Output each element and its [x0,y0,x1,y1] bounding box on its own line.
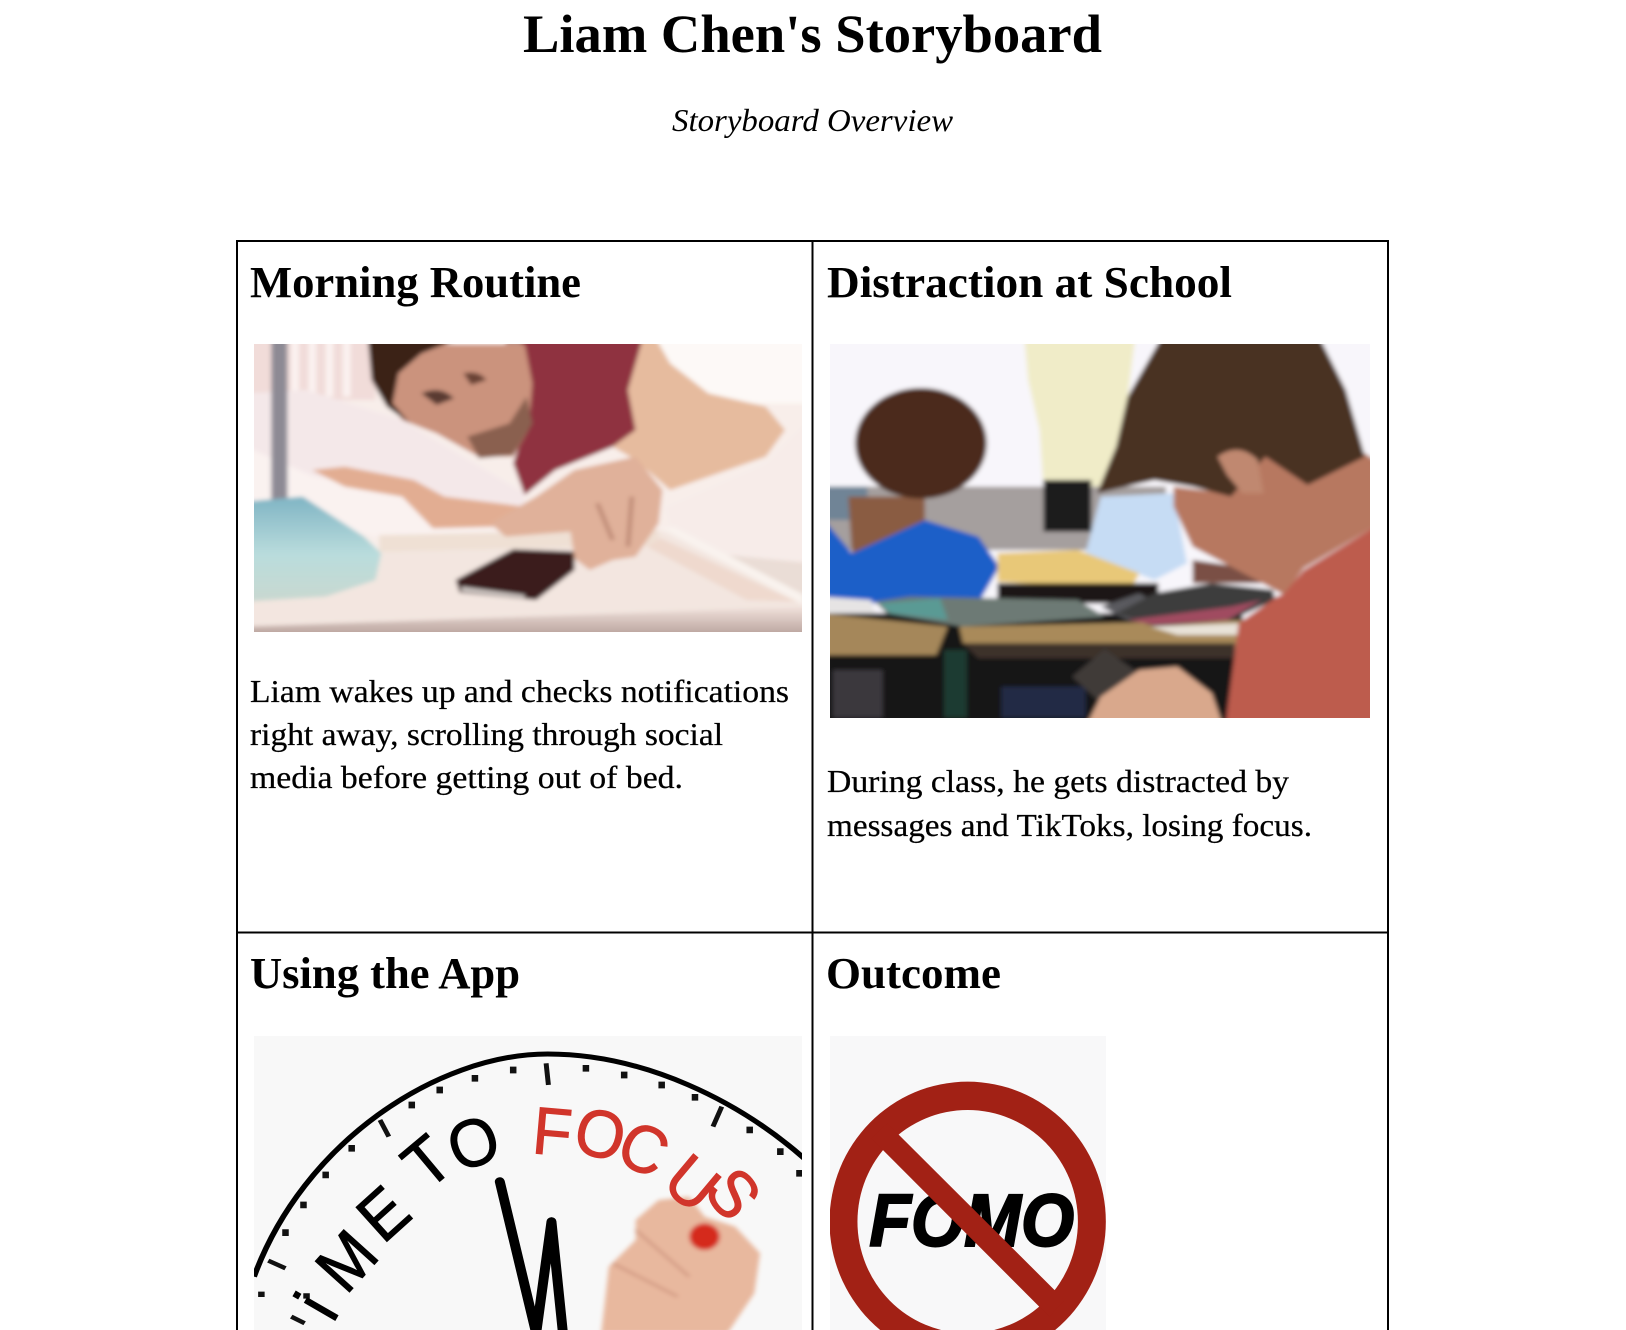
subtitle: Storyboard Overview [672,102,954,138]
page title: Liam Chen's Storyboard [523,4,1102,64]
clock lettering: focus [536,1107,758,1218]
caption: distraction at school: messages and TikToks, losing focus. [827,808,1312,843]
panel: outcome [825,949,1112,1330]
clock lettering: focus: O [568,1092,633,1176]
clock ticks [261,1063,799,1323]
panel: using the app [250,949,808,1330]
caption: morning routine: right away, scrolling through social [250,717,723,752]
clock lettering: time to: M [301,1216,392,1306]
caption: morning routine [250,674,789,795]
clock lettering: focus: U [651,1140,734,1227]
heading: distraction at school: Distraction at School [827,258,1232,307]
caption: morning routine: Liam wakes up and checks notifications [250,674,789,709]
heading: outcome: Outcome [826,949,1001,998]
clock lettering: focus: S [691,1154,776,1233]
image: no FOMO sign: FOMO [869,1179,1074,1262]
caption: distraction at school: During class, he gets distracted by [827,764,1289,799]
image: time to focus clock [254,1036,808,1330]
clock lettering: time to: E [343,1172,424,1256]
clock arc [254,1054,808,1277]
storyboard table grid [237,241,1388,1330]
photo: man reaching for phone in bed [245,337,812,643]
clock lettering: time to: O [437,1099,509,1186]
hand holding marker [601,1197,760,1330]
image: no FOMO sign [830,1082,1106,1330]
clock lettering: focus: F [530,1093,575,1171]
heading: using the app: Using the App [250,949,520,998]
clock lettering: time to [292,1118,496,1321]
clock hands [500,1182,563,1330]
storyboard page [236,14,1389,1330]
clock lettering: time to: T [388,1121,466,1203]
clock lettering: focus: C [607,1105,680,1192]
panel: morning routine [245,258,812,795]
clock lettering: time to: i [281,1282,353,1330]
photo: students in class with phone under desk [821,337,1380,727]
panel: distraction at school [821,258,1380,843]
heading: morning routine: Morning Routine [250,258,581,307]
caption: distraction at school [827,764,1312,843]
caption: morning routine: media before getting out of bed. [250,760,683,795]
